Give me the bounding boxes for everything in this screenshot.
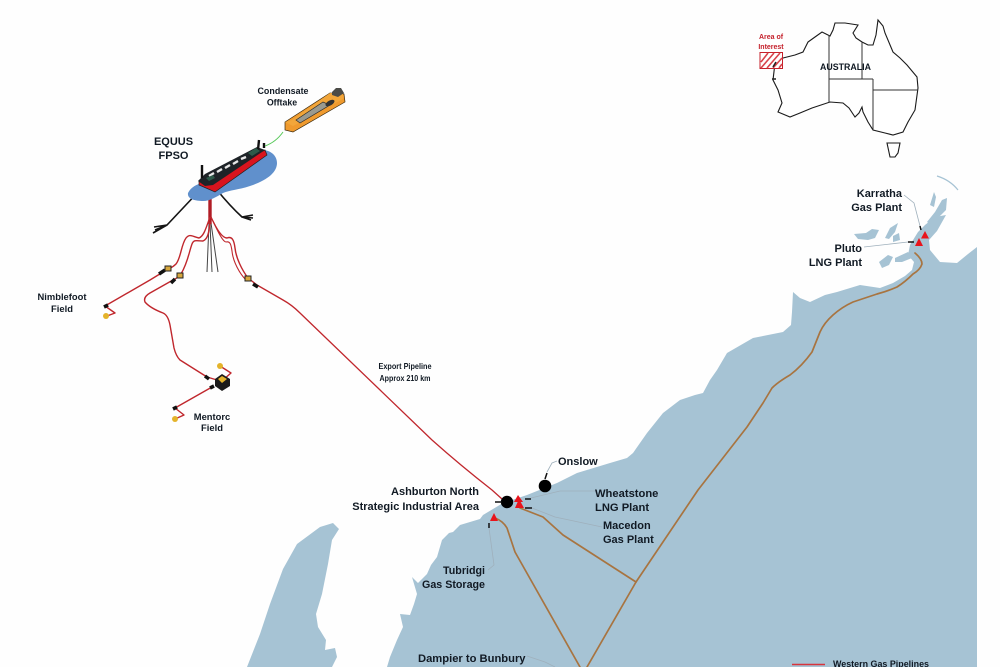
Tasmania	[887, 143, 900, 157]
label: Onslow: Onslow	[558, 456, 598, 468]
export riser	[211, 217, 257, 285]
label: EQUUS FPSO: EQUUS	[154, 136, 193, 148]
label: Ashburton North: Ashburton North	[391, 486, 479, 498]
site leader ticks	[489, 226, 921, 528]
marker: Wheatstone LNG Plant	[514, 495, 523, 502]
label: Pluto LNG Plant: LNG Plant	[809, 257, 862, 269]
islands near Karratha	[854, 176, 958, 268]
wellheads	[103, 313, 223, 422]
label: Nimblefoot Field: Nimblefoot	[38, 291, 86, 302]
label: Karratha Gas Plant: Karratha	[857, 188, 903, 200]
marker: Onslow	[539, 480, 551, 492]
state borders	[829, 35, 918, 130]
label: Wheatstone LNG Plant: LNG Plant	[595, 502, 649, 514]
land: peninsula	[247, 523, 339, 667]
legend: Western Gas Pipelines	[792, 659, 929, 667]
label: Mentorc Field: Mentorc	[194, 411, 230, 422]
label: Ashburton North: Strategic Industrial Area	[352, 501, 480, 513]
manifold: Mentorc	[215, 374, 230, 391]
marker: Tubridgi Gas Storage	[490, 513, 498, 521]
marker: Macedon Gas Plant	[515, 499, 524, 508]
condensate hose	[265, 132, 283, 146]
label: Nimblefoot Field: Field	[51, 303, 73, 314]
label: Tubridgi Gas Storage: Gas Storage	[422, 579, 485, 591]
marker: Karratha Gas Plant	[921, 231, 929, 238]
offtake tanker	[285, 88, 345, 132]
site markers	[489, 226, 929, 528]
export pipeline	[257, 285, 502, 499]
label: Wheatstone LNG Plant: Wheatstone	[595, 488, 658, 500]
marker: Pluto LNG Plant	[915, 238, 923, 246]
label: Export Pipeline: Export Pipeline	[378, 361, 432, 371]
land: mainland	[387, 215, 977, 667]
label: Pluto LNG Plant: Pluto	[834, 243, 862, 255]
label: Mentorc Field: Field	[201, 422, 223, 433]
label: AUSTRALIA: AUSTRALIA	[820, 62, 871, 73]
outline of Australia	[773, 20, 918, 135]
flowline to Nimblefoot	[105, 217, 210, 316]
label: Tubridgi Gas Storage: Tubridgi	[443, 565, 485, 577]
label: Export Pipeline: Approx 210 km	[380, 373, 430, 383]
label: Macedon Gas Plant: Gas Plant	[603, 534, 654, 546]
label: Dampier to Bunbury: Dampier to Bunbury	[418, 653, 526, 665]
leader lines	[488, 195, 920, 667]
marker on coast	[772, 62, 776, 79]
subsea connectors	[104, 266, 258, 409]
inset: Australia locator map	[758, 20, 918, 157]
label: Condensate Offtake: Condensate	[258, 86, 309, 96]
risers and flowlines	[105, 192, 257, 419]
marker: Ashburton North	[501, 496, 513, 508]
label: Macedon Gas Plant: Macedon	[603, 520, 651, 532]
area of interest box	[760, 52, 782, 68]
FPSO footprint	[188, 150, 277, 201]
FPSO vessel	[198, 140, 267, 192]
label: EQUUS FPSO: FPSO	[159, 150, 189, 162]
label: Area of Interest: Interest	[758, 44, 784, 51]
label: Karratha Gas Plant: Gas Plant	[851, 202, 902, 214]
gas pipelines	[495, 253, 922, 667]
label: Condensate Offtake: Offtake	[267, 98, 297, 108]
flowline to Mentorc	[145, 222, 217, 380]
mooring lines	[153, 190, 253, 233]
label: Area of Interest: Area of	[759, 34, 784, 41]
